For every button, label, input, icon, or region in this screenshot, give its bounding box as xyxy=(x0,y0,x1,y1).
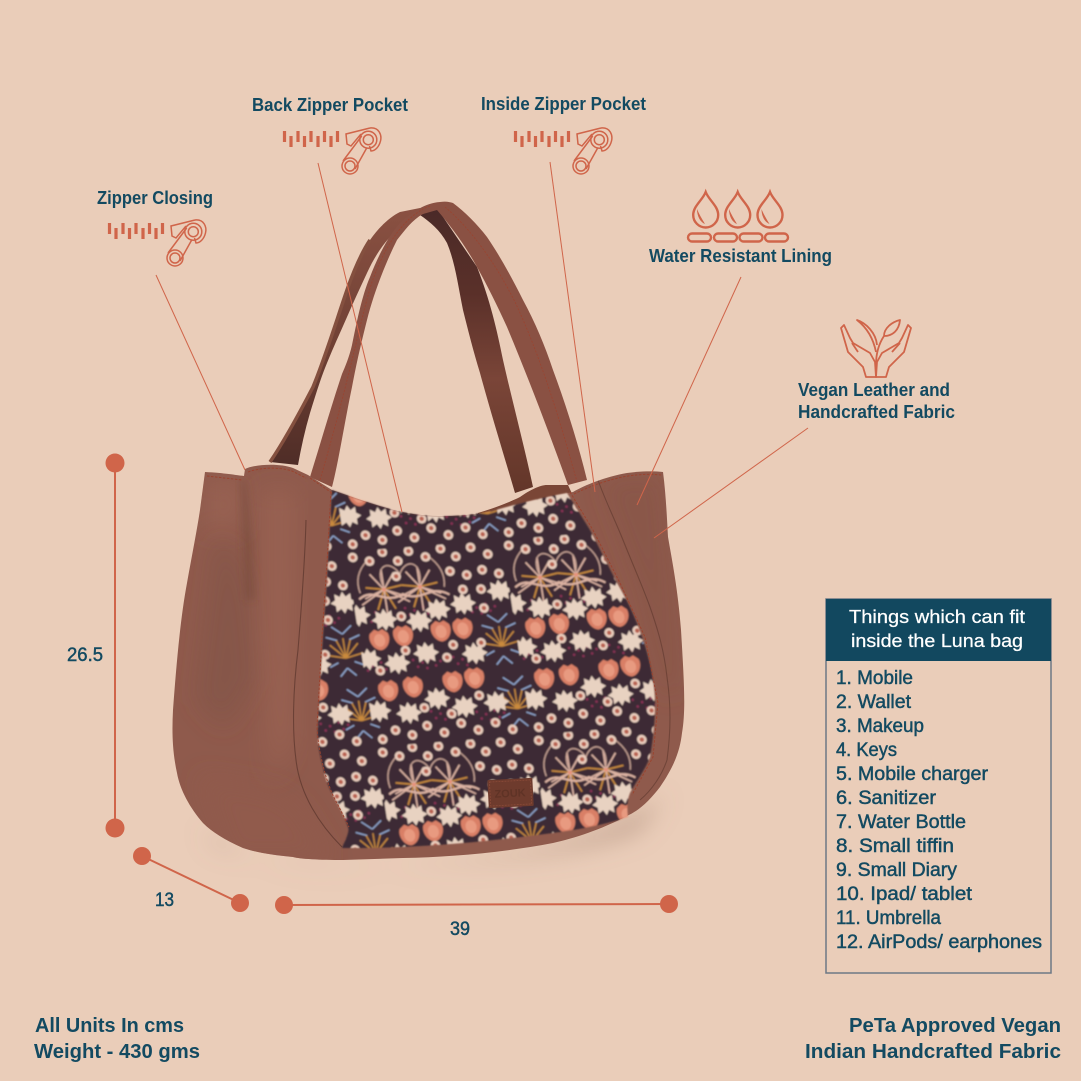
panel header: inside the Luna bag xyxy=(851,630,1023,651)
footer: units and weight: All Units In cms xyxy=(35,1014,184,1037)
list of items: 2. Wallet xyxy=(836,692,912,713)
list of items: 3. Makeup xyxy=(836,716,924,737)
stitching xyxy=(207,468,661,827)
list of items: 6. Sanitizer xyxy=(836,788,937,809)
callout: vegan leather and handcrafted fabric: Handcrafted Fabric xyxy=(798,402,955,422)
list of items: 11. Umbrella xyxy=(836,908,941,929)
footer: vegan and handcrafted note xyxy=(805,1014,1061,1063)
panel header xyxy=(826,599,1051,661)
list of items: 7. Water Bottle xyxy=(836,812,966,833)
bag body xyxy=(172,465,684,860)
ground shadow xyxy=(200,795,665,866)
front strap xyxy=(310,202,587,487)
callout: vegan leather and handcrafted fabric: Vegan Leather and xyxy=(798,380,950,400)
footer: vegan and handcrafted note: Indian Handcrafted Fabric xyxy=(805,1040,1061,1063)
leader lines xyxy=(156,162,808,538)
list of items: 12. AirPods/ earphones xyxy=(836,932,1042,953)
footer: units and weight xyxy=(34,1014,200,1063)
dimension: depth 13 xyxy=(133,847,249,912)
icon: water drops xyxy=(688,192,788,242)
icon: zipper xyxy=(284,128,381,174)
dimension: depth 13: 13 xyxy=(155,890,174,911)
callout: zipper closing: Zipper Closing xyxy=(97,188,213,208)
callout: back zipper pocket: Back Zipper Pocket xyxy=(252,95,408,115)
callout: water resistant lining xyxy=(649,192,832,266)
icon: hands holding plant xyxy=(841,320,911,377)
brand label patch: ZOUK xyxy=(494,787,526,801)
callout: inside zipper pocket: Inside Zipper Pocket xyxy=(481,94,646,114)
list of items: 4. Keys xyxy=(836,740,897,761)
brand label patch xyxy=(487,778,534,808)
callout: water resistant lining: Water Resistant Lining xyxy=(649,246,832,266)
panel: things which fit xyxy=(826,599,1051,973)
list of items: 1. Mobile xyxy=(836,668,913,689)
icon: zipper xyxy=(110,220,206,266)
list of items: 10. Ipad/ tablet xyxy=(836,884,973,905)
footer: units and weight: Weight - 430 gms xyxy=(34,1040,200,1063)
list of items: 5. Mobile charger xyxy=(836,764,989,785)
dimension: height 26.5: 26.5 xyxy=(67,645,103,666)
footer: vegan and handcrafted note: PeTa Approved Vegan xyxy=(849,1014,1061,1037)
patterned fabric panel xyxy=(318,490,655,848)
icon: zipper xyxy=(516,128,612,174)
panel header: Things which can fit xyxy=(849,606,1025,627)
leather shading xyxy=(195,475,680,860)
bag photo illustration xyxy=(172,202,684,866)
list of items: 8. Small tiffin xyxy=(836,836,954,857)
dimension: height 26.5 xyxy=(67,454,124,838)
list of items: 9. Small Diary xyxy=(836,860,958,881)
handles xyxy=(270,202,587,520)
dimension: width 39 xyxy=(275,895,678,940)
callout: vegan leather and handcrafted fabric xyxy=(798,320,955,422)
dimension: width 39: 39 xyxy=(450,919,470,940)
callout: zipper closing xyxy=(97,188,213,266)
callout: back zipper pocket xyxy=(252,95,408,174)
list of items xyxy=(836,668,1042,953)
callout: inside zipper pocket xyxy=(481,94,646,174)
